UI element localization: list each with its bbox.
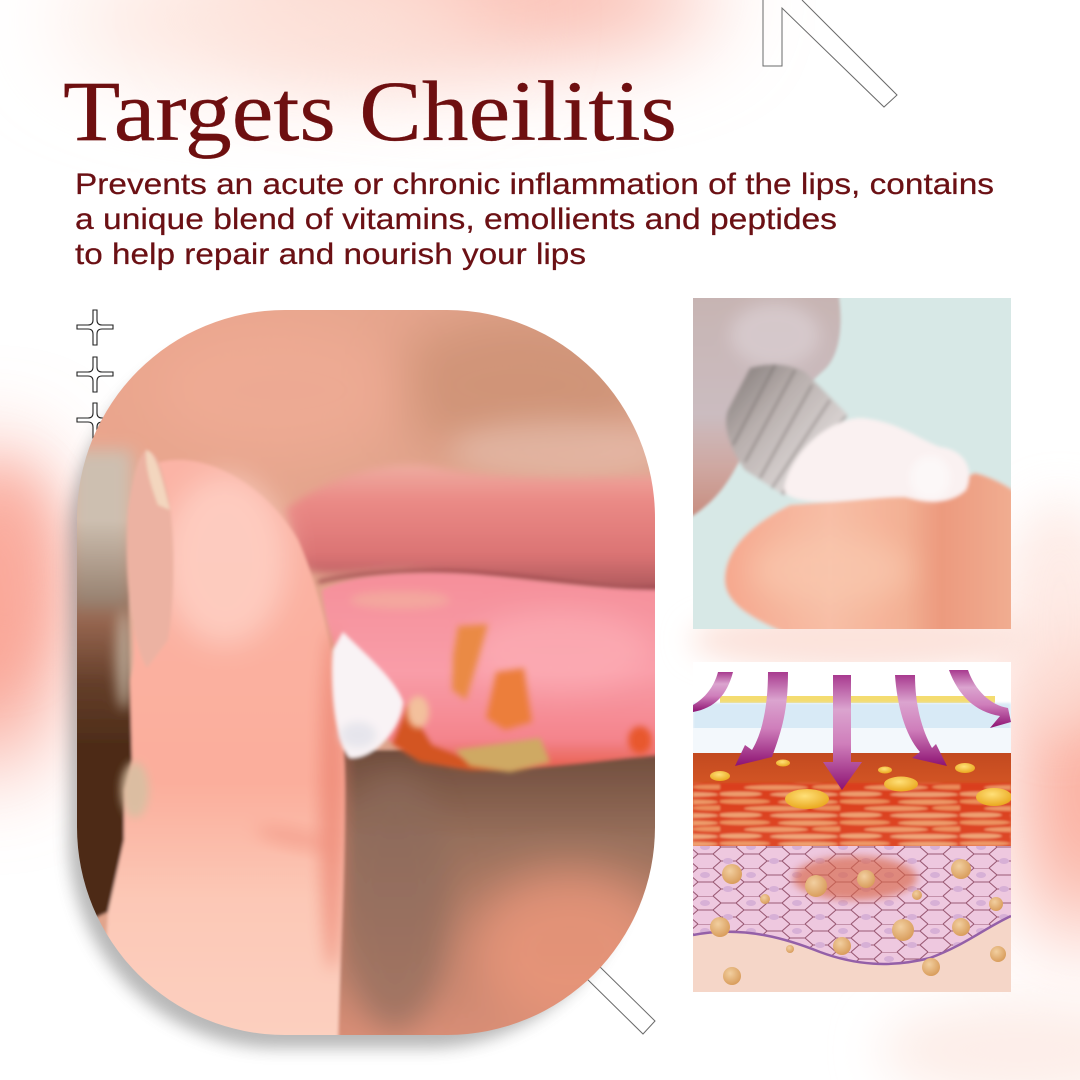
diagram: lower dermis bbox=[693, 918, 1011, 992]
photo: cream dab bbox=[332, 632, 403, 758]
diagram: nutrient beads bbox=[710, 859, 1006, 985]
main photo: thumb applying cream to lips bbox=[60, 300, 670, 1050]
decorative outline shape: bottom of photo bbox=[583, 963, 655, 1034]
photo: thumbnail bbox=[127, 450, 174, 668]
diagram: red upper skin layer bbox=[693, 753, 1011, 849]
fingertip bbox=[725, 473, 1025, 640]
photo: face skin bbox=[77, 310, 655, 936]
photo: lip lesions bbox=[392, 624, 652, 772]
decorative outline shape: top right bbox=[763, 0, 897, 107]
description text bbox=[75, 168, 994, 271]
photo: grey background streak bbox=[70, 450, 132, 610]
tube body bbox=[685, 290, 841, 516]
description text: a unique blend of vitamins, emollients and peptides bbox=[75, 203, 837, 236]
icon: sparkle stars bbox=[77, 310, 113, 438]
cream bbox=[784, 418, 969, 502]
description text: to help repair and nourish your lips bbox=[75, 238, 586, 271]
photo: chin shadow bbox=[338, 748, 655, 1035]
photo: upper lip bbox=[285, 465, 665, 592]
diagram: pink cell layer bbox=[693, 846, 1011, 971]
photo: dark background bbox=[77, 530, 134, 918]
photo: cream tube on fingertip bbox=[693, 298, 1011, 629]
photo: lower lip bbox=[322, 573, 660, 769]
diagram: product layers bbox=[720, 696, 995, 703]
tube nozzle bbox=[726, 365, 848, 496]
description text: Prevents an acute or chronic inflammation of the lips, contains bbox=[75, 168, 994, 201]
photo: lip parting line bbox=[318, 571, 660, 588]
title: Targets Cheilitis bbox=[63, 63, 677, 159]
diagram: purple arrows bbox=[693, 670, 1011, 790]
photo: thumb bbox=[100, 460, 345, 1045]
diagram: oil droplets bbox=[710, 760, 1012, 809]
photo shadow bbox=[69, 332, 635, 1048]
diagram: skin absorption layers bbox=[693, 662, 1012, 992]
